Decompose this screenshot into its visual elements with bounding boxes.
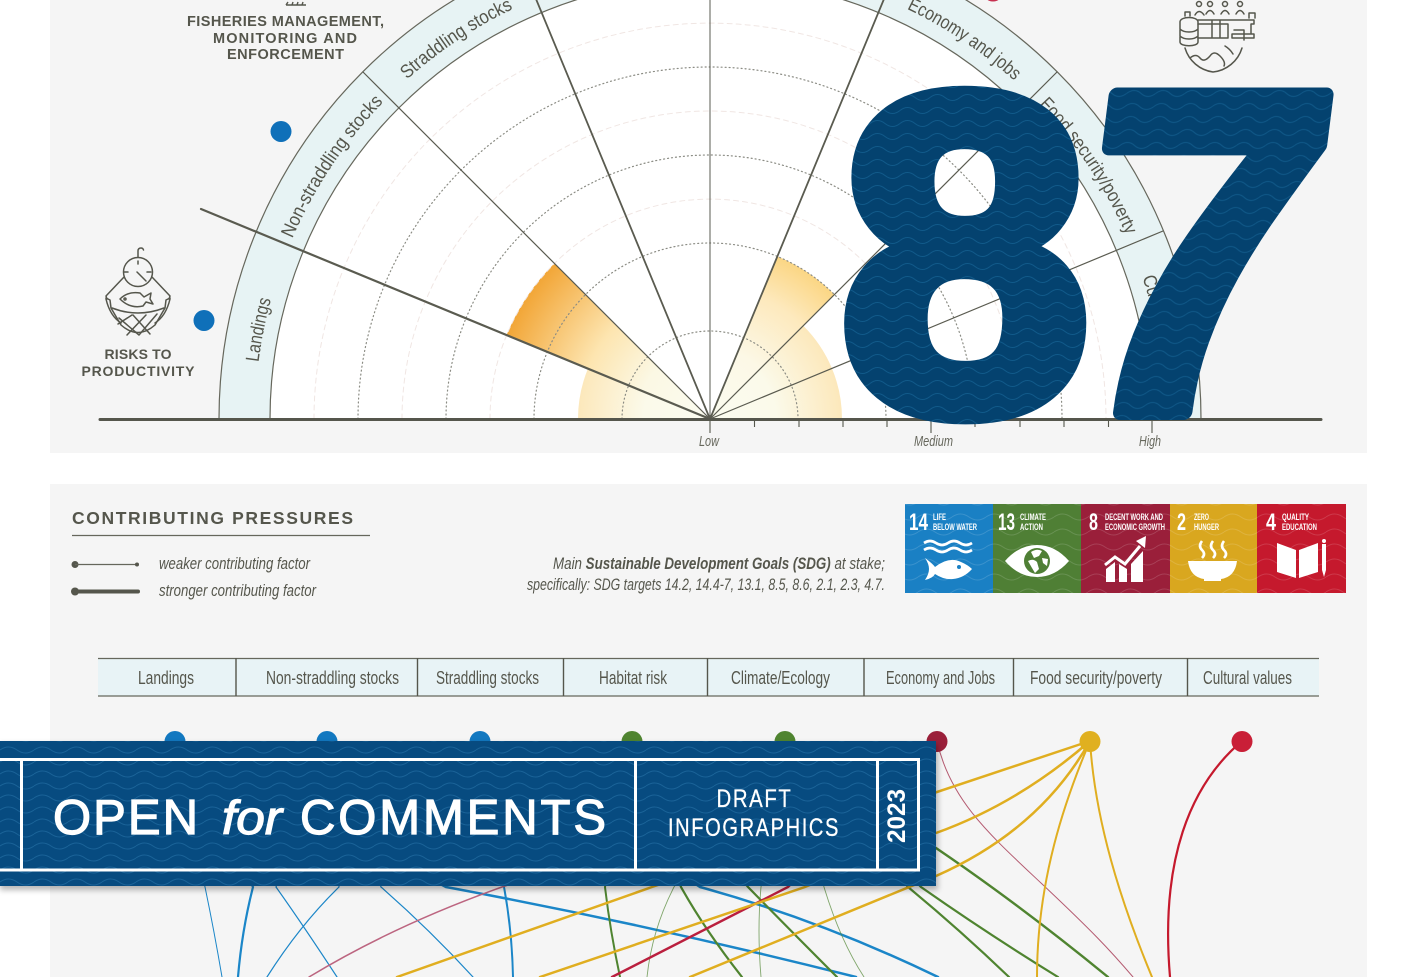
banner body [0, 741, 936, 886]
panel: risk dial background [50, 0, 1367, 453]
axis line with scale ticks [100, 419, 1321, 433]
text: main SDG at stake: specifically: SDG targets 14.2, 14.4-7, 13.1, 8.5, 8.6, 2.1, 2.3, 4.7. [527, 575, 885, 594]
spokes [201, 0, 1163, 419]
SDG 4: EDUCATION [1282, 522, 1317, 533]
banner: open for comments [0, 741, 938, 890]
legend: stronger factor: stronger contributing factor [159, 581, 317, 600]
banner title: COMMENTS [300, 791, 606, 845]
big number 87 [840, 0, 1358, 510]
SDG 4: 4 [1266, 509, 1276, 536]
dot: non-straddling marker [270, 121, 292, 142]
SDG 8: ECONOMIC GROWTH [1105, 522, 1165, 533]
banner title [53, 791, 606, 845]
heading: risks to productivity: RISKS TO [104, 346, 172, 362]
icon: fisheries management (cropped) [286, 2, 306, 5]
crimson connections [309, 741, 1133, 977]
table header row: Habitat risk [599, 667, 668, 688]
risk wedges [507, 256, 842, 419]
table header row: Landings [138, 667, 194, 688]
SDG 14: 14 [909, 509, 928, 536]
axis scale labels [699, 433, 1161, 450]
heading: risks to productivity [82, 346, 195, 379]
SDG 2: ZERO [1194, 512, 1209, 523]
yellow connections [397, 741, 1152, 977]
panel: contributing pressures background [50, 484, 1367, 977]
heading: fisheries management: ENFORCEMENT [227, 47, 344, 63]
banner year: 2023 [883, 789, 911, 843]
concentric rings [314, 23, 1106, 419]
sector labels: Non-straddling stocks [280, 96, 382, 238]
banner shadow [0, 744, 938, 890]
SDG 13: ACTION [1020, 522, 1043, 533]
SDG 4 [1257, 504, 1346, 593]
dot: top marker [982, 0, 1004, 2]
table header row: Climate/Ecology [731, 667, 831, 688]
SDG 13: CLIMATE [1020, 512, 1046, 523]
big number 87: 7 [1045, 0, 1358, 510]
SDG 8 [1081, 504, 1170, 593]
SDG 8: DECENT WORK AND [1105, 512, 1163, 523]
axis scale labels: Medium [914, 433, 953, 450]
green connections [605, 741, 1108, 977]
SDG 13: 13 [998, 509, 1015, 536]
table header row: Non-straddling stocks [266, 667, 399, 688]
banner subtitle: INFOGRAPHICS [668, 814, 840, 842]
SDG 13 [993, 504, 1081, 593]
SDG 2: 2 [1177, 509, 1186, 536]
legend: weaker factor [72, 554, 311, 573]
big number 87: 8 [840, 4, 1090, 506]
sector labels: Cultural values [1144, 276, 1158, 300]
blue connections [175, 741, 938, 977]
axis scale labels: Low [699, 433, 720, 450]
banner title: OPEN [53, 791, 198, 845]
connection nodes [164, 731, 1252, 752]
table header row: Straddling stocks [436, 667, 539, 688]
SDG 2: HUNGER [1194, 522, 1219, 533]
legend: weaker factor: weaker contributing factor [159, 554, 311, 573]
sector labels [246, 0, 1158, 361]
heading: risks to productivity: PRODUCTIVITY [82, 363, 195, 379]
heading: fisheries management: MONITORING AND [213, 31, 357, 47]
SDG 4: QUALITY [1282, 512, 1309, 523]
radar dial chart [98, 0, 1322, 450]
legend: stronger factor [71, 581, 317, 600]
dial label band [219, 0, 1201, 419]
table header row [98, 658, 1319, 696]
banner title: for [222, 791, 285, 844]
text: main SDG at stake [527, 554, 885, 594]
red connection [1168, 741, 1242, 977]
cropped heading behind number: SCIENCE AND [1164, 84, 1270, 100]
banner subtitle [668, 785, 840, 842]
dot: landings marker [194, 310, 214, 331]
axis scale labels: High [1139, 433, 1161, 450]
table header row: Food security/poverty [1030, 667, 1163, 688]
heading: fisheries management [187, 14, 384, 63]
banner frame [0, 760, 918, 870]
table header row: Economy and Jobs [886, 667, 995, 688]
SDG 8: 8 [1089, 509, 1098, 536]
sector labels: Food security/poverty [1041, 96, 1136, 232]
dial inner white area [270, 0, 1150, 419]
SDG 14 [905, 504, 993, 593]
icon: science and knowledge [1180, 2, 1255, 72]
sector labels: Landings [246, 298, 272, 361]
SDG icons strip [905, 504, 1346, 593]
SDG 2 [1170, 504, 1257, 593]
banner subtitle: DRAFT [716, 785, 792, 813]
table header row: Cultural values [1203, 667, 1292, 688]
SDG 14: LIFE [933, 512, 946, 523]
SDG 14: BELOW WATER [933, 522, 977, 533]
heading rule [72, 534, 370, 536]
text: main SDG at stake: Main Sustainable Development Goals (SDG) at stake; [553, 554, 885, 573]
heading: contributing pressures: CONTRIBUTING PRESSURES [72, 508, 353, 528]
heading: fisheries management: FISHERIES MANAGEMENT, [187, 14, 384, 30]
icon: risks to productivity net with fish [106, 248, 170, 335]
pressure connection lines [175, 741, 1242, 977]
